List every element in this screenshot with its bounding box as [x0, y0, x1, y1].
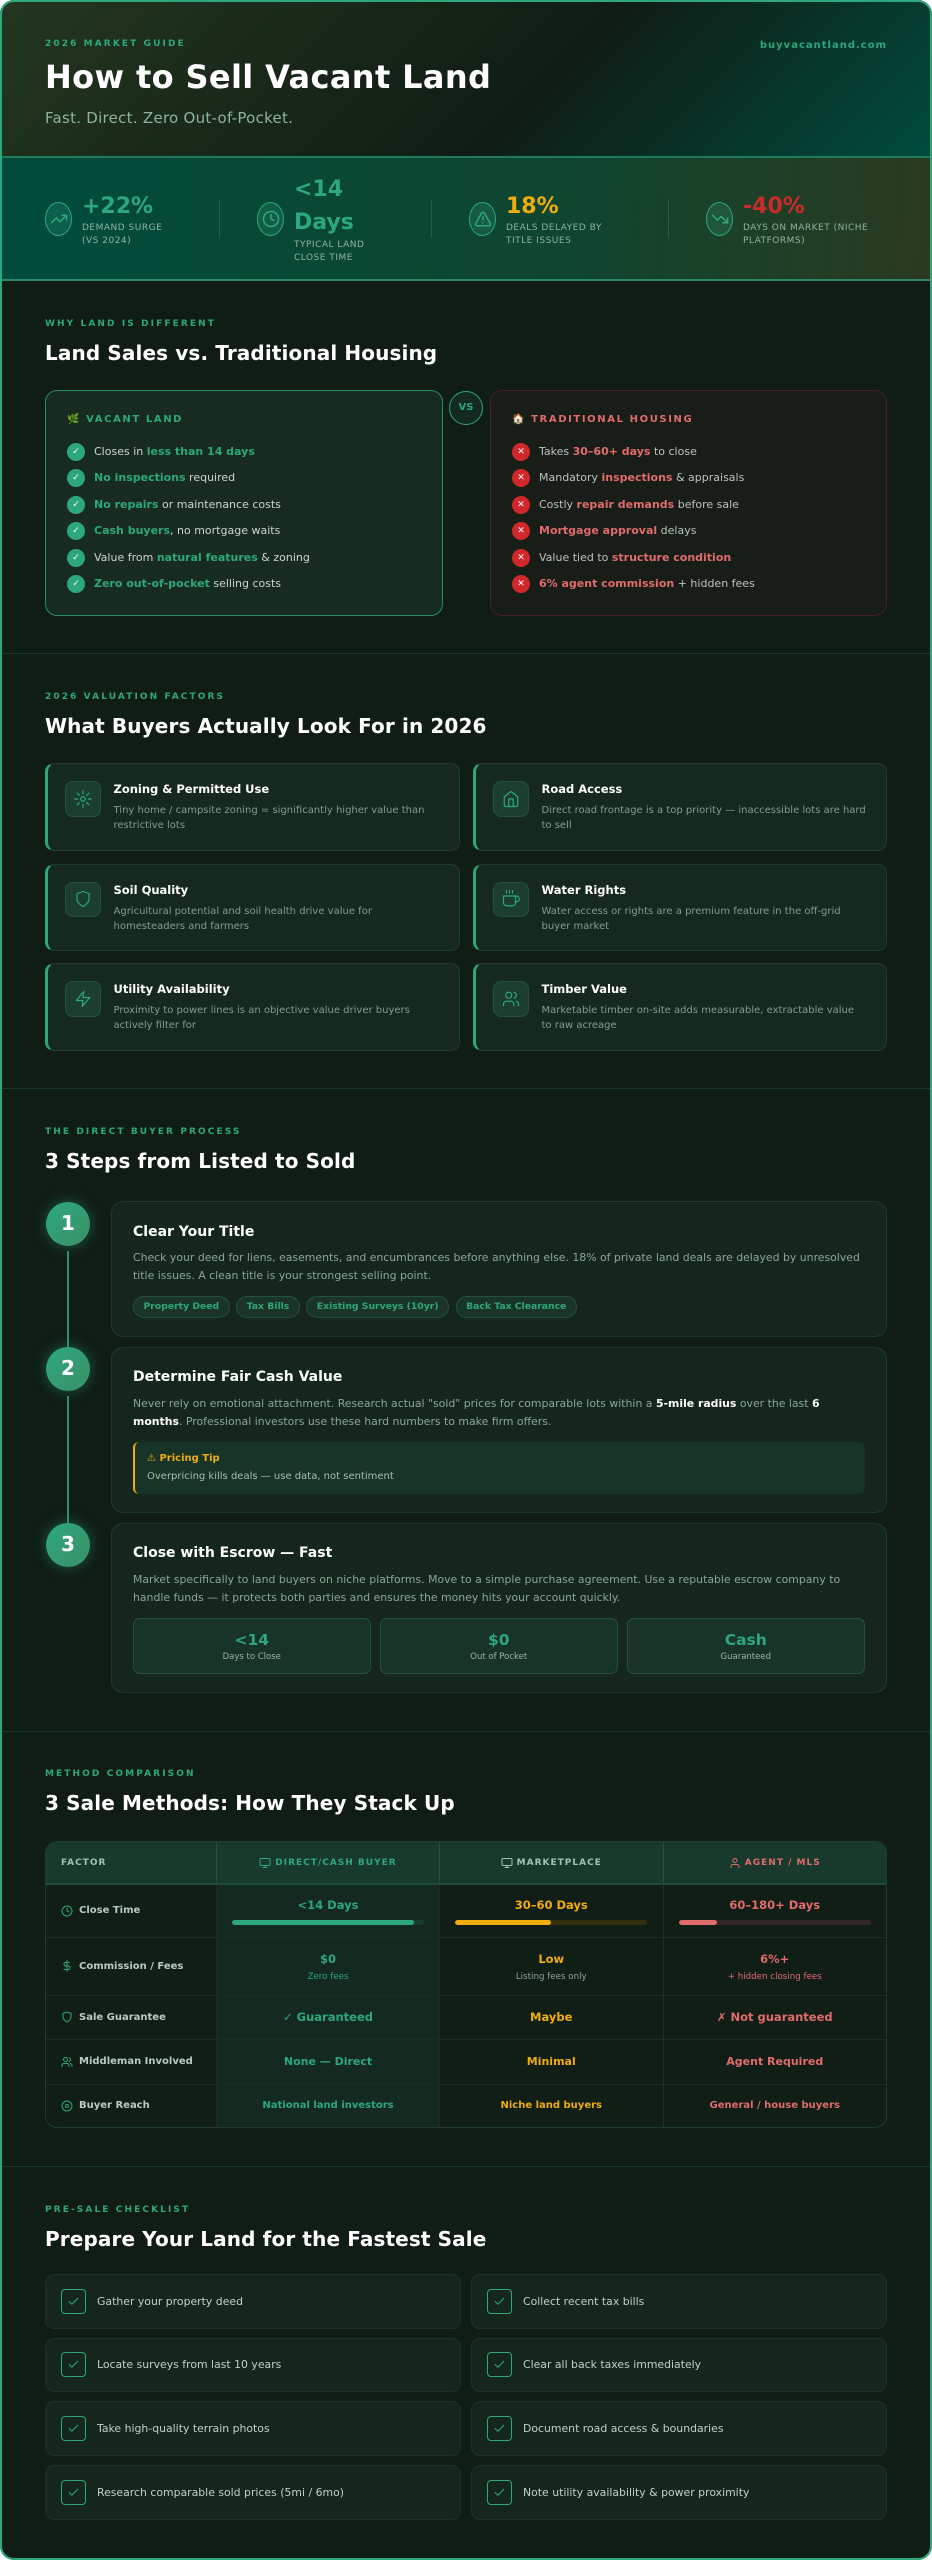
list item: ✕ [517, 553, 525, 563]
list item: ✓ [72, 473, 80, 483]
card description: actively filter for [114, 1020, 196, 1031]
list item [512, 469, 744, 487]
heading: Prepare Your Land for the Fastest Sale [45, 2227, 486, 2251]
cell: direct guarantee [217, 1996, 440, 2040]
list item: Zero out-of-pocket selling costs [94, 577, 281, 590]
list item: Takes 30–60+ days to close [539, 445, 697, 458]
step text: months. Professional investors use these hard numbers to make firm offers. [133, 1415, 551, 1428]
stat: title delays [469, 194, 602, 246]
step number 3 [46, 1523, 90, 1567]
cell: agent middleman: Agent Required [726, 2055, 823, 2068]
vs badge [449, 391, 483, 425]
list item: Value from natural features & zoning [94, 551, 310, 564]
list item: ✕ [517, 579, 525, 589]
tag: Existing Surveys (10yr) [317, 1301, 439, 1312]
step text [133, 1573, 840, 1604]
icon: trending up [45, 202, 72, 236]
list item [67, 469, 235, 487]
metric: cash [627, 1618, 864, 1674]
card description: Water access or rights are a premium feature in the off-grid [542, 906, 841, 917]
main title: How to Sell Vacant Land [45, 58, 491, 96]
step text: Never rely on emotional attachment. Research actual "sold" prices for comparable lots within a 5-mile radius over the last 6 [133, 1397, 820, 1410]
card description: Proximity to power lines is an objective value driver buyers [114, 1005, 410, 1016]
label [82, 223, 162, 246]
list item [67, 496, 281, 514]
tip text: Overpricing kills deals — use data, not sentiment [147, 1471, 394, 1482]
cell: marketplace fees [440, 1938, 664, 1996]
card description [114, 805, 424, 831]
stat: days on market [706, 194, 868, 246]
list item: Closes in less than 14 days [94, 445, 255, 458]
heading: Land Sales vs. Traditional Housing [45, 341, 437, 365]
subtitle: Fast. Direct. Zero Out-of-Pocket. [45, 109, 293, 127]
card description [542, 906, 841, 932]
label: DEALS DELAYED BY [506, 223, 602, 233]
checklist item [471, 2465, 887, 2520]
list item: 6% agent commission + hidden fees [539, 577, 755, 590]
cell: marketplace middleman: Minimal [527, 2055, 576, 2068]
label: TITLE ISSUES [506, 236, 571, 246]
list item [512, 443, 697, 461]
metric: out of pocket [380, 1618, 618, 1674]
row label: close time: Close Time [79, 1905, 140, 1916]
icon: trending down [706, 202, 733, 236]
connector line 1 [67, 1251, 69, 1347]
cell: direct reach: National land investors [262, 2100, 394, 2111]
checklist item [45, 2274, 461, 2329]
section: land vs housing [45, 319, 887, 616]
value: -40% [743, 194, 805, 219]
step 1 card [110, 1201, 887, 1337]
row label: guarantee [46, 1996, 217, 2040]
card description: Agricultural potential and soil health drive value for [114, 906, 372, 917]
cell: direct reach [217, 2084, 440, 2127]
card: zoning [45, 763, 460, 851]
step number 1 [46, 1202, 90, 1246]
tag [133, 1296, 230, 1318]
icon: sun [65, 781, 100, 816]
stat: demand surge [45, 194, 162, 246]
cell: direct fees [217, 1938, 440, 1996]
list item: No inspections required [94, 471, 235, 484]
label: DAYS ON MARKET (NICHE [743, 223, 868, 233]
checklist item: Collect recent tax bills [523, 2295, 644, 2308]
card description: homesteaders and farmers [114, 921, 249, 932]
row label: guarantee: Sale Guarantee [79, 2012, 166, 2023]
cell: marketplace reach: Niche land buyers [500, 2100, 602, 2111]
row label: middleman [46, 2040, 217, 2084]
step title: Determine Fair Cash Value [133, 1369, 342, 1385]
cell: agent middleman [664, 2040, 886, 2084]
cell: agent fees: 6%+ [760, 1952, 789, 1966]
header: direct [217, 1842, 440, 1885]
cell: direct guarantee: ✓ Guaranteed [283, 2010, 373, 2024]
step 3 card [110, 1523, 887, 1693]
heading: 3 Sale Methods: How They Stack Up [45, 1791, 455, 1815]
panel heading: 🏠 TRADITIONAL HOUSING [512, 414, 693, 425]
step title: Clear Your Title [133, 1224, 254, 1240]
card: timber value [473, 963, 887, 1051]
label: Days to Close [223, 1652, 281, 1662]
icon: bolt [65, 981, 100, 1017]
eyebrow: THE DIRECT BUYER PROCESS [45, 1127, 242, 1137]
label [506, 223, 602, 246]
card description: Direct road frontage is a top priority — inaccessible lots are hard [542, 805, 866, 816]
heading: What Buyers Actually Look For in 2026 [45, 714, 487, 738]
list item [512, 575, 755, 593]
cell: direct fees: $0 [320, 1952, 336, 1966]
connector line 2 [67, 1396, 69, 1523]
step text: title issues. A clean title is your strongest selling point. [133, 1269, 431, 1282]
tag: Property Deed [144, 1301, 219, 1312]
row label: commission: Commission / Fees [79, 1960, 183, 1972]
tag: Tax Bills [247, 1301, 289, 1312]
list item: Cash buyers, no mortgage waits [94, 524, 280, 537]
cell: marketplace guarantee: Maybe [530, 2010, 572, 2024]
cell: agent fees [664, 1938, 886, 1996]
row label: middleman: Middleman Involved [79, 2056, 193, 2067]
section: checklist [45, 2205, 887, 2520]
value: <14 [294, 176, 343, 202]
step number 2 [46, 1347, 90, 1391]
website: buyvacantland.com [760, 40, 887, 51]
step 2 card [110, 1347, 887, 1513]
list item [512, 522, 696, 540]
checklist item: Clear all back taxes immediately [523, 2358, 701, 2371]
cell: marketplace middleman [440, 2040, 664, 2084]
panel: traditional housing [490, 390, 887, 616]
eyebrow: PRE-SALE CHECKLIST [45, 2205, 190, 2215]
cell: direct middleman: None — Direct [284, 2055, 372, 2068]
list item: ✓ [72, 526, 80, 536]
card description [542, 1005, 854, 1031]
panel heading: 🌿 VACANT LAND [67, 414, 183, 425]
card description: Marketable timber on-site adds measurable, extractable value [542, 1005, 854, 1016]
step text: handle funds — it protects both parties and ensures the money hits your account quickly. [133, 1591, 620, 1604]
value: +22% [82, 194, 153, 219]
label [294, 240, 364, 263]
checklist item: Gather your property deed [97, 2295, 243, 2308]
label: TYPICAL LAND [294, 240, 364, 250]
eyebrow: 2026 MARKET GUIDE [45, 39, 186, 49]
metric: days to close [133, 1618, 370, 1674]
step text: Market specifically to land buyers on niche platforms. Move to a simple purchase agreement. Use a reputable escrow company to [133, 1573, 840, 1586]
list item [67, 549, 310, 567]
comparison table [45, 1841, 887, 2128]
card description: buyer market [542, 921, 609, 932]
cell: marketplace close time [440, 1885, 664, 1938]
checklist item [45, 2338, 461, 2392]
list item: No repairs or maintenance costs [94, 498, 281, 511]
list item: Costly repair demands before sale [539, 498, 739, 511]
stats band [0, 158, 932, 281]
cell: agent guarantee [664, 1996, 886, 2040]
cell: direct close time [217, 1885, 440, 1938]
step number 1: 1 [61, 1210, 75, 1234]
card description [114, 906, 372, 932]
value [294, 176, 354, 234]
row label: commission [46, 1938, 217, 1996]
list item [67, 575, 281, 593]
icon: shield [65, 882, 100, 917]
list item: ✕ [517, 526, 525, 536]
heading: 3 Steps from Listed to Sold [45, 1149, 355, 1173]
card description: to raw acreage [542, 1020, 617, 1031]
tip title: ⚠ Pricing Tip [147, 1453, 220, 1464]
cell: agent reach: General / house buyers [710, 2100, 840, 2111]
label: DEMAND SURGE [82, 223, 162, 233]
panel: vacant land [45, 390, 443, 616]
value: $0 [488, 1631, 510, 1649]
label: Guaranteed [721, 1652, 771, 1662]
row label: close time [46, 1885, 217, 1938]
step text: Check your deed for liens, easements, and encumbrances before anything else. 18% of private land deals are delayed by unresolved [133, 1251, 860, 1264]
header: agent: AGENT / MLS [745, 1858, 821, 1868]
list item [67, 522, 280, 540]
icon: users [493, 981, 528, 1017]
label: PLATFORMS) [743, 236, 805, 246]
step number 2: 2 [61, 1356, 75, 1380]
row label: buyer reach: Buyer Reach [79, 2100, 150, 2111]
cell: marketplace close time: 30–60 Days [515, 1898, 588, 1912]
cell: marketplace reach [440, 2084, 664, 2127]
value: 18% [506, 194, 559, 219]
tag [236, 1296, 300, 1318]
step title: Close with Escrow — Fast [133, 1545, 332, 1561]
list item: ✓ [72, 447, 80, 457]
step number 3: 3 [61, 1532, 75, 1556]
eyebrow: WHY LAND IS DIFFERENT [45, 319, 216, 329]
list item: Value tied to structure condition [539, 551, 731, 564]
value: Days [294, 210, 354, 234]
checklist item [45, 2401, 461, 2456]
document tags [133, 1296, 577, 1318]
list item: ✓ [72, 500, 80, 510]
card title: Timber Value [542, 982, 627, 996]
checklist item [45, 2465, 461, 2520]
card description [542, 805, 866, 831]
list item: ✕ [517, 473, 525, 483]
list item [67, 443, 255, 461]
icon: clock [257, 202, 284, 236]
header: marketplace [440, 1842, 664, 1885]
card: water rights [473, 864, 887, 951]
icon: cup [493, 882, 528, 917]
card title: Road Access [542, 782, 622, 796]
tag [306, 1296, 449, 1318]
card description [114, 1005, 410, 1031]
row label: buyer reach [46, 2084, 217, 2127]
cell: marketplace fees: Listing fees only [516, 1972, 587, 1982]
header: factor [46, 1842, 217, 1885]
card title: Water Rights [542, 883, 626, 897]
checklist item: Take high-quality terrain photos [97, 2422, 270, 2435]
card: utility availability [45, 963, 460, 1051]
list item [512, 496, 739, 514]
icon: home [493, 781, 528, 816]
checklist item [471, 2274, 887, 2329]
value: Cash [725, 1631, 767, 1649]
checklist item: Document road access & boundaries [523, 2422, 724, 2435]
list item: Mandatory inspections & appraisals [539, 471, 744, 484]
cell: agent close time [664, 1885, 886, 1938]
label: CLOSE TIME [294, 253, 353, 263]
header: agent [664, 1842, 886, 1885]
list item: ✕ [517, 500, 525, 510]
cell: marketplace fees: Low [538, 1952, 564, 1966]
card title: Soil Quality [114, 883, 188, 897]
vs badge: VS [459, 402, 473, 413]
section: 3 steps [40, 1127, 887, 1693]
list item: ✓ [72, 553, 80, 563]
section: method comparison [45, 1769, 887, 2128]
cell: agent guarantee: ✗ Not guaranteed [717, 2010, 833, 2024]
cell: agent close time: 60–180+ Days [729, 1898, 820, 1912]
card description: Tiny home / campsite zoning = significantly higher value than [114, 805, 424, 816]
card description: to sell [542, 820, 572, 831]
card: soil quality [45, 864, 460, 951]
cell: direct close time: <14 Days [298, 1898, 358, 1912]
checklist item [471, 2401, 887, 2456]
card: road access [473, 763, 887, 851]
list item: Mortgage approval delays [539, 524, 696, 537]
list item: ✕ [517, 447, 525, 457]
checklist item [471, 2338, 887, 2392]
icon: warning [469, 202, 496, 236]
header: direct: DIRECT/CASH BUYER [275, 1858, 397, 1868]
header: marketplace: MARKETPLACE [517, 1858, 602, 1868]
list item [512, 549, 731, 567]
stat: close time [257, 176, 364, 263]
label: Out of Pocket [470, 1652, 527, 1662]
card description: restrictive lots [114, 820, 185, 831]
cell: direct fees: Zero fees [307, 1972, 349, 1982]
label: (VS 2024) [82, 236, 131, 246]
checklist item: Note utility availability & power proximity [523, 2486, 749, 2499]
list item: ✓ [72, 579, 80, 589]
value: <14 [234, 1631, 269, 1649]
cell: marketplace guarantee [440, 1996, 664, 2040]
eyebrow: 2026 VALUATION FACTORS [45, 692, 225, 702]
tag [456, 1296, 577, 1318]
section: valuation factors [45, 692, 887, 1051]
card title: Utility Availability [114, 982, 230, 996]
checklist item: Locate surveys from last 10 years [97, 2358, 281, 2371]
header banner [0, 0, 932, 158]
step text [133, 1397, 820, 1428]
checklist item: Research comparable sold prices (5mi / 6mo) [97, 2486, 344, 2499]
header: factor: FACTOR [61, 1858, 106, 1868]
step text [133, 1251, 860, 1282]
pricing tip callout [133, 1442, 864, 1494]
cell: direct middleman [217, 2040, 440, 2084]
card title: Zoning & Permitted Use [114, 782, 269, 796]
tag: Back Tax Clearance [466, 1301, 566, 1312]
eyebrow: METHOD COMPARISON [45, 1769, 196, 1779]
label [743, 223, 868, 246]
cell: agent fees: + hidden closing fees [728, 1972, 822, 1982]
